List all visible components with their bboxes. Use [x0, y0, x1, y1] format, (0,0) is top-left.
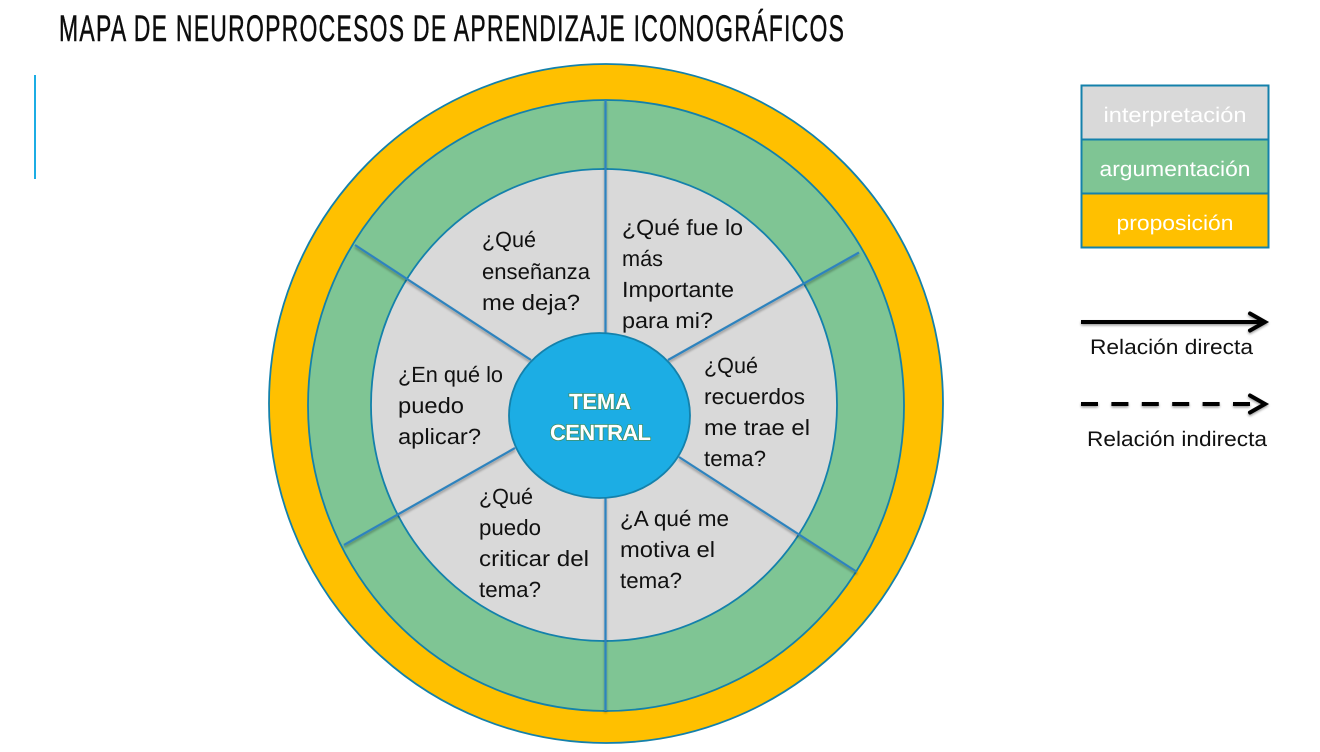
accent bar [34, 75, 36, 179]
question: aplicar: aplicar? [398, 424, 481, 449]
sector dividers [344, 100, 859, 711]
question: recuerdos: ¿Qué [704, 353, 758, 378]
ring: argumentación [308, 100, 904, 711]
title: MAPA DE NEUROPROCESOS DE APRENDIZAJE ICONOGRÁFICOS [59, 8, 844, 49]
arrow: relación directa [1081, 314, 1265, 330]
ring: proposición [269, 64, 943, 743]
question: enseñanza: ¿Qué [482, 227, 536, 252]
question: lo más importante: más [622, 246, 663, 271]
question: recuerdos: me trae el [704, 415, 810, 440]
center circle: tema central [509, 333, 690, 498]
label: relación directa: Relación directa [1090, 336, 1253, 359]
question: recuerdos: tema? [704, 446, 766, 471]
legend [1082, 86, 1268, 248]
question: aplicar [398, 362, 503, 449]
question: motiva: tema? [620, 568, 682, 593]
question: motiva [620, 506, 729, 593]
legend: argumentación [1082, 140, 1268, 194]
question: aplicar: ¿En qué lo [398, 362, 503, 387]
legend: interpretación [1082, 86, 1268, 140]
question: recuerdos: recuerdos [704, 384, 805, 409]
question: criticar: puedo [479, 515, 541, 540]
question: criticar: ¿Qué [479, 484, 533, 509]
question: enseñanza: enseñanza [482, 259, 591, 284]
concentric circle diagram [269, 64, 943, 743]
question: criticar: criticar del [479, 546, 589, 571]
question: aplicar: puedo [398, 393, 464, 418]
question: lo más importante: para mi? [622, 308, 713, 333]
question: criticar [479, 484, 589, 602]
question: lo más importante: ¿Qué fue lo [622, 215, 743, 240]
center circle: tema central: TEMA [569, 389, 631, 414]
question: lo más importante [622, 215, 743, 333]
question: criticar: tema? [479, 577, 541, 602]
question: enseñanza: me deja? [482, 290, 580, 315]
ring: interpretación [371, 169, 837, 641]
legend: proposición [1082, 194, 1268, 248]
question: motiva: ¿A qué me [620, 506, 729, 531]
question: lo más importante: Importante [622, 277, 734, 302]
legend: interpretación: interpretación [1104, 104, 1246, 127]
legend: proposición: proposición [1116, 212, 1234, 235]
question: recuerdos [704, 353, 810, 471]
label: relación indirecta: Relación indirecta [1087, 428, 1267, 451]
question: motiva: motiva el [620, 537, 715, 562]
arrow: relación indirecta [1081, 396, 1265, 412]
center circle: tema central: CENTRAL [550, 420, 651, 445]
question: enseñanza [482, 227, 591, 315]
legend: argumentación: argumentación [1100, 158, 1250, 181]
